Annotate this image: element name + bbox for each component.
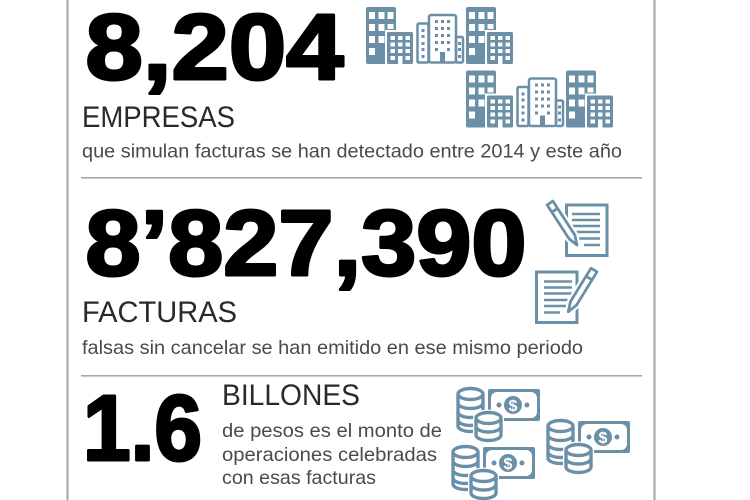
section: billones xyxy=(83,376,630,498)
description: empresas: que simulan facturas se han detectado entre 2014 y este año xyxy=(82,140,622,162)
description: facturas: falsas sin cancelar se han emitido en ese mismo periodo xyxy=(82,337,583,359)
heading: facturas: FACTURAS xyxy=(82,296,237,329)
description: billones: de pesos es el monto de xyxy=(222,420,442,442)
panel frame xyxy=(68,0,654,500)
icon: document with pencil, upper xyxy=(547,201,607,256)
heading: empresas: EMPRESAS xyxy=(82,101,235,134)
icon: document with pencil, lower xyxy=(536,268,597,322)
big number: 1.6: 1.6 xyxy=(83,376,202,480)
section: empresas xyxy=(82,0,622,162)
big number: 8'827,390: 8’827,390 xyxy=(86,191,526,295)
description: billones: operaciones celebradas xyxy=(222,444,437,466)
heading: billones: BILLONES xyxy=(222,379,360,412)
icon: buildings bottom row xyxy=(466,70,615,130)
icon: buildings top row xyxy=(366,7,515,66)
icon: coins and bill, bottom xyxy=(453,446,535,498)
icon: coins and bill, top xyxy=(458,388,540,440)
description: billones xyxy=(222,420,442,489)
section: facturas xyxy=(82,191,607,359)
icon: coins and bill, right xyxy=(548,420,630,472)
description: billones: con esas facturas xyxy=(222,467,376,489)
